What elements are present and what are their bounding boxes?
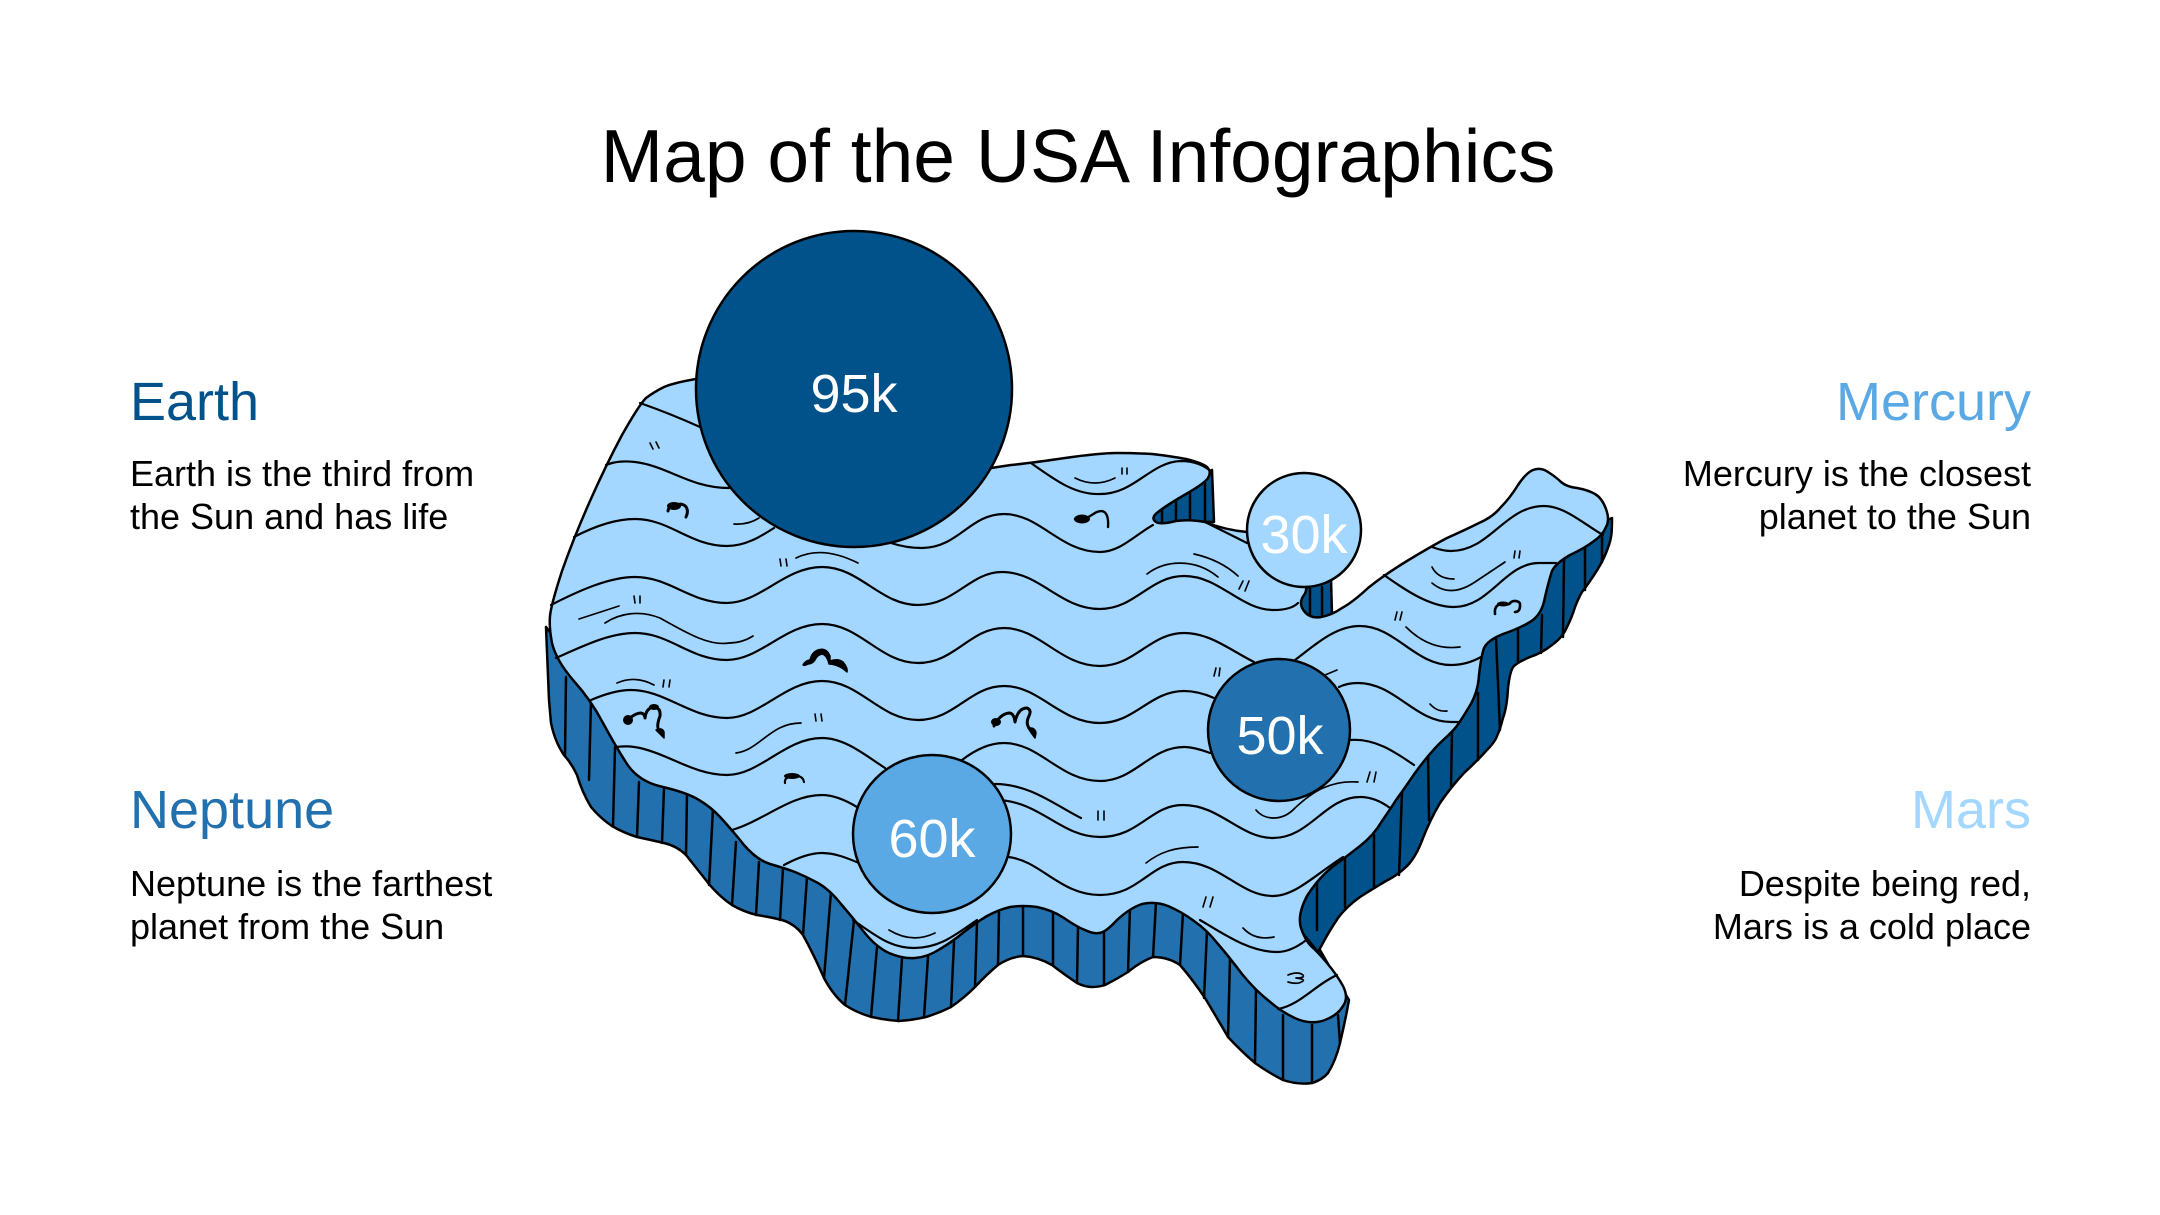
icon: bird cluster south west bbox=[784, 773, 804, 783]
icon: bird cluster north bbox=[1074, 511, 1108, 527]
bubble: 95k bbox=[696, 231, 1012, 547]
map top surface bbox=[550, 379, 1608, 1022]
icon: bird mark florida bbox=[1288, 973, 1303, 983]
panel: Neptune bbox=[130, 780, 492, 947]
heading: Neptune: Neptune bbox=[130, 780, 334, 840]
icon: bird cluster north west bbox=[667, 502, 687, 517]
text: Mercury description: Mercury is the closest bbox=[1683, 453, 2031, 494]
map contour waves bbox=[551, 403, 1603, 1009]
map tick marks bbox=[634, 442, 1520, 907]
bubble: 50k bbox=[1208, 659, 1350, 801]
map bird marks bbox=[623, 502, 1520, 983]
map side: east wall bbox=[1298, 518, 1612, 952]
heading: Mars: Mars bbox=[1911, 780, 2031, 840]
text: Mars description: Despite being red, bbox=[1739, 863, 2031, 904]
bubble: 50k: 50k bbox=[1236, 706, 1325, 766]
panel: Earth bbox=[130, 372, 474, 537]
text: Mercury description: planet to the Sun bbox=[1759, 496, 2031, 537]
text: Earth description: the Sun and has life bbox=[130, 496, 448, 537]
bubble: 30k: 30k bbox=[1260, 505, 1349, 565]
heading: Mercury: Mercury bbox=[1836, 372, 2031, 432]
icon: bird cluster north east bbox=[1495, 601, 1520, 614]
map small detail strokes bbox=[579, 478, 1505, 938]
map: isometric USA bbox=[546, 379, 1612, 1084]
icon: bird cluster central bbox=[803, 649, 847, 672]
bubble: 60k bbox=[853, 755, 1011, 913]
map side: northern lake notch bbox=[1150, 470, 1214, 527]
bubble: 30k bbox=[1247, 473, 1361, 587]
bubble: 95k: 95k bbox=[810, 364, 899, 424]
text: Mars description: Mars is a cold place bbox=[1713, 906, 2031, 947]
panel: Mars bbox=[1713, 780, 2031, 947]
panel: Mercury bbox=[1683, 372, 2031, 537]
bubble: 60k: 60k bbox=[888, 809, 977, 869]
title: Map of the USA Infographics bbox=[601, 114, 1555, 198]
heading: Earth: Earth bbox=[130, 372, 259, 432]
text: Earth description: Earth is the third from bbox=[130, 453, 474, 494]
map side: great lakes notch bbox=[1298, 578, 1332, 619]
text: Neptune description: Neptune is the farthest bbox=[130, 863, 492, 904]
icon: bird cluster south central bbox=[991, 708, 1036, 738]
icon: bird cluster west bbox=[623, 704, 664, 738]
text: Neptune description: planet from the Sun bbox=[130, 906, 444, 947]
map side: south and west wall bbox=[546, 627, 1349, 1084]
